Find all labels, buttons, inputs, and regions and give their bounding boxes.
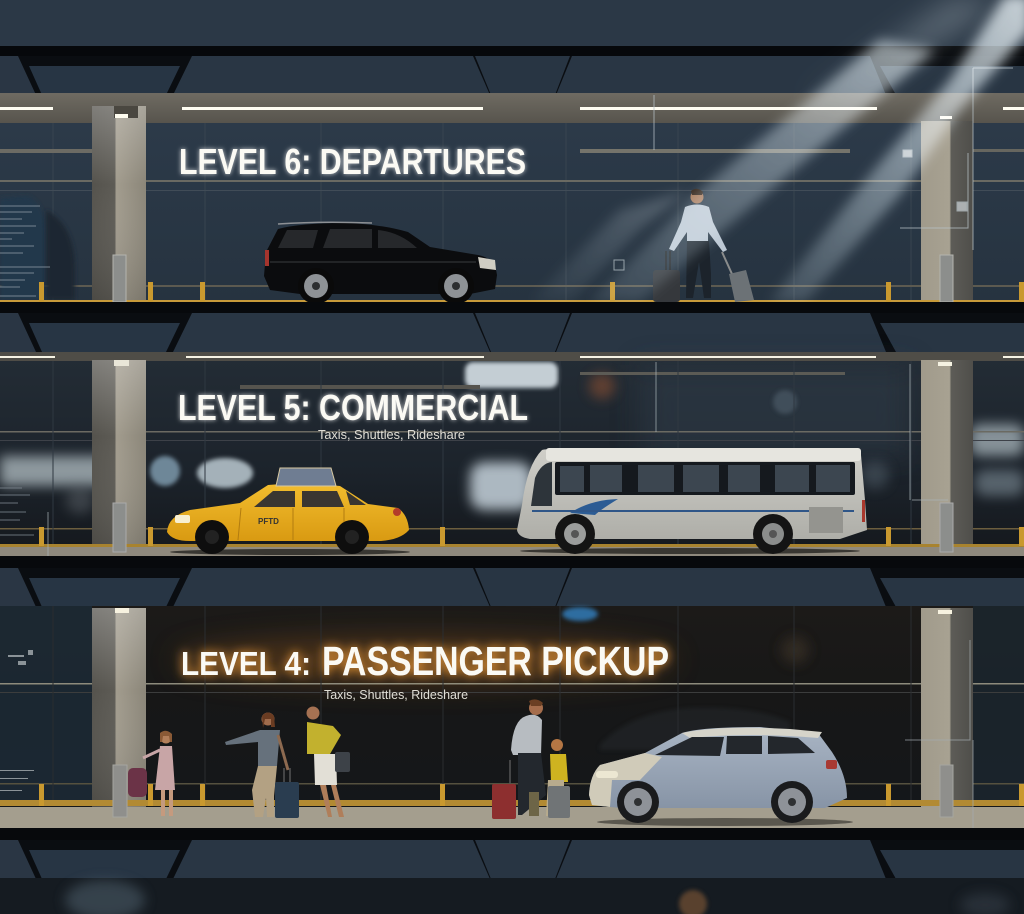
blue and orange lights [562, 607, 809, 664]
black slab level 4 [0, 828, 1024, 840]
upper right blue haze [640, 365, 910, 455]
panel: level 4 passenger pickup [0, 606, 1024, 870]
white shuttle bus [517, 448, 867, 554]
subheading level 4: Taxis, Shuttles, Rideshare [324, 687, 468, 702]
level 4 horizontal rails [0, 683, 1024, 784]
panel: level 5 commercial [0, 352, 1024, 594]
amber glow behind heading [175, 636, 675, 684]
level 5 horizontal rails [0, 372, 1024, 530]
light rays [530, 0, 1024, 302]
soffit panels: bottom [0, 840, 1024, 880]
man with red suitcase [492, 699, 546, 819]
bollards level 6 [113, 255, 953, 302]
right cool reflections [973, 606, 1024, 806]
bottom blurred band [0, 878, 1024, 914]
subheading level 5: Taxis, Shuttles, Rideshare [318, 427, 465, 442]
heading: level 6: LEVEL 6: DEPARTURES [179, 141, 526, 182]
floor level 4 [0, 807, 1024, 828]
ceiling light strips level 6 [0, 107, 1024, 110]
left reflection: data text [0, 196, 75, 300]
silver SUV [589, 727, 853, 826]
heading: level 4: PASSENGER PICKUP [322, 638, 669, 684]
yellow taxi: PFTD [258, 517, 279, 526]
soffit panels: top [0, 56, 1024, 96]
car reflection on glass [600, 708, 790, 750]
level 6 glass mullions [53, 123, 911, 300]
man with two suitcases [653, 189, 754, 302]
yellow taxi [167, 468, 410, 555]
level 6 horizontal rails [0, 149, 1024, 287]
ceiling beam level 5 [0, 352, 1024, 361]
level 4 mullions [53, 606, 911, 806]
soffit panels: level 5 [0, 313, 1024, 353]
column right level 6 [921, 116, 973, 302]
HUD overlay level 4 [905, 640, 973, 870]
level 6 glass wall [0, 123, 1024, 302]
bollards level 4 [113, 765, 953, 817]
soffit panels: level 4 [0, 568, 1024, 608]
column left level 4 [92, 608, 146, 813]
bokeh lights [0, 362, 1024, 514]
woman in yellow top [306, 706, 350, 817]
left data reflection level 4 [0, 650, 34, 791]
railing level 5 [0, 527, 1024, 547]
lower black slab [0, 302, 1024, 313]
level 5 glass wall [0, 360, 1024, 546]
top ceiling band [0, 0, 1024, 46]
railing level 6 [0, 282, 1024, 302]
girl with maroon bag [128, 731, 175, 816]
railing level 4 [0, 784, 1024, 806]
ceiling beam level 6 [0, 93, 1024, 123]
cool left reflections [0, 606, 92, 806]
heading: level 4: LEVEL 4: [181, 645, 311, 682]
woman waving with navy suitcase [225, 712, 299, 818]
child with suitcase [546, 739, 570, 818]
column left level 6 [92, 106, 146, 302]
HUD overlay level 5 [48, 362, 948, 594]
panel: level 6 departures [0, 0, 1024, 304]
level 4 glass wall [0, 606, 1024, 810]
column right level 5 [921, 360, 973, 550]
black slab level 5 [0, 556, 1024, 568]
ceiling light strips level 5 [0, 356, 1024, 358]
bollards level 5 [113, 503, 953, 552]
column left level 5 [92, 360, 146, 550]
column right level 4 [921, 608, 973, 813]
heading: level 5: LEVEL 5: COMMERCIAL [178, 387, 528, 428]
HUD overlay level 6 [614, 68, 1013, 270]
floor level 5 [0, 547, 1024, 556]
level 5 mullions [53, 360, 911, 545]
upper black beam [0, 46, 1024, 56]
left data reflection level 5 [0, 488, 34, 535]
black SUV [264, 222, 497, 304]
